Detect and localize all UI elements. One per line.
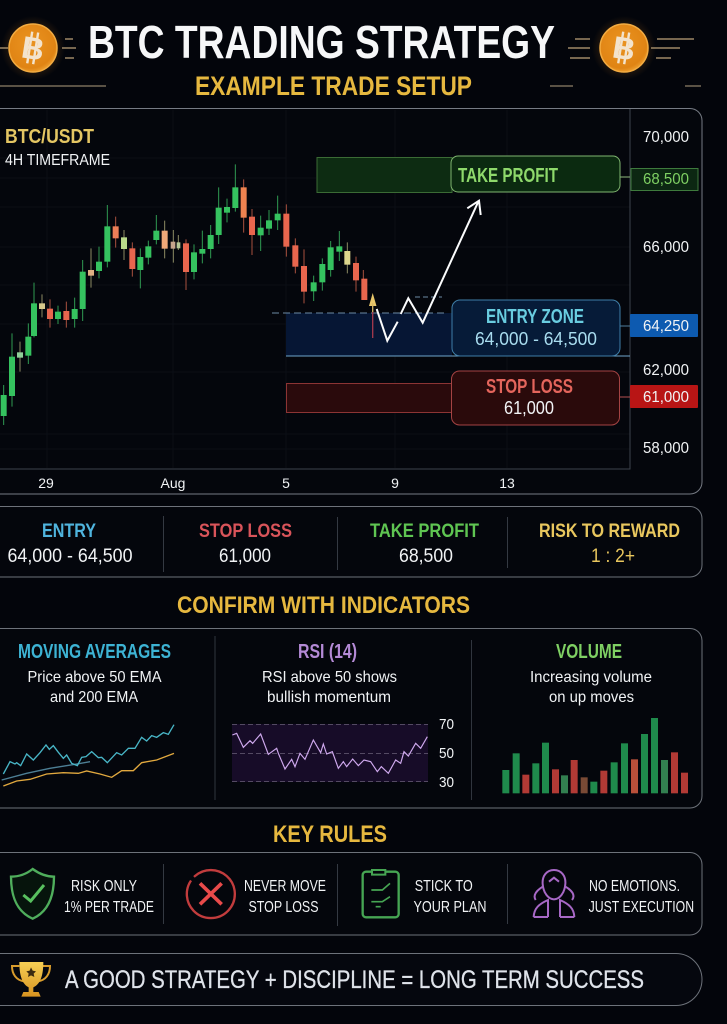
rule: never move stop loss [187,870,326,918]
panel: trade summary [0,506,702,577]
heading: key rules: KEY RULES [273,821,387,848]
take profit band [317,158,452,192]
panel: key rules [0,852,702,935]
rule: risk only: RISK ONLY [71,878,137,895]
stop loss label: STOP LOSS [486,376,573,398]
last candle [369,293,376,338]
price tag: 64,250 [630,314,698,337]
price axis labels [643,129,689,457]
stop loss label: 61,000 [504,398,554,418]
price tag: 64,250: 64,250 [643,318,689,335]
date axis labels: 9 [391,475,399,491]
line chart: rsi: 70 [439,716,454,733]
rule: no emotions [534,870,694,917]
stat: entry: 64,000 - 64,500 [8,546,132,567]
candlesticks [1,164,367,425]
panel: indicators [0,628,702,808]
entry zone label [452,300,630,356]
indicator: volume: Increasing volume [530,669,652,686]
icon: person outline [534,870,574,917]
indicator: rsi [232,641,454,791]
indicator: volume: on up moves [549,689,634,706]
line chart: price and EMAs [2,725,174,786]
indicator: moving averages [2,641,174,786]
price tag: 61,000: 61,000 [643,389,689,406]
icon: clipboard [363,870,399,917]
panel: price chart [0,108,702,494]
rule: stick to your plan: YOUR PLAN [414,899,486,916]
price tag: 68,500: 68,500 [643,171,689,188]
chart title: BTC/USDT [5,126,94,148]
indicator: moving averages: Price above 50 EMA [28,669,162,686]
take profit label [451,156,630,192]
icon: bitcoin coin right: B [610,29,638,68]
subtitle: EXAMPLE TRADE SETUP [195,71,472,101]
indicator: volume [502,641,688,793]
take profit label: TAKE PROFIT [458,165,558,187]
icon: coin streaks left [0,39,106,86]
date axis labels: 13 [499,475,515,491]
indicator: moving averages: MOVING AVERAGES [18,641,171,663]
rule: no emotions: NO EMOTIONS. [589,878,680,895]
indicator: moving averages: and 200 EMA [50,689,138,706]
stat: take profit [370,521,479,567]
entry zone label: ENTRY ZONE [486,306,584,328]
stat: stop loss [199,521,292,567]
rule: never move stop loss: STOP LOSS [248,899,318,916]
stat: stop loss: 61,000 [219,546,271,567]
stat: entry: ENTRY [42,521,96,542]
stop loss label [452,371,630,425]
line chart: rsi: 50 [439,745,454,762]
price tag: 61,000 [630,385,698,408]
date axis labels: 29 [38,475,54,491]
stat: risk to reward: RISK TO REWARD [539,521,680,542]
line chart: rsi [232,716,454,791]
indicator: volume: VOLUME [556,641,622,663]
date axis labels: 5 [282,475,290,491]
rule: never move stop loss: NEVER MOVE [244,878,326,895]
price axis labels: 62,000 [643,362,689,379]
stop loss band [286,384,452,412]
icon: trophy [12,962,50,997]
price axis labels: 66,000 [643,239,689,256]
line chart: rsi: 30 [439,774,454,791]
icon: red cross circle [187,870,235,918]
rule: stick to your plan [363,870,486,917]
indicator: rsi: RSI above 50 shows [262,669,397,686]
title: BTC TRADING STRATEGY [88,16,555,68]
price axis labels: 58,000 [643,440,689,457]
stat: stop loss: STOP LOSS [199,521,292,542]
bar chart: volume [502,718,688,793]
stat: take profit: 68,500 [399,546,453,567]
price tag: 68,500 [631,168,698,190]
stat: risk to reward: 1 : 2+ [591,546,635,567]
entry zone band [272,297,630,356]
date axis labels [38,475,515,491]
stat: risk to reward [539,521,680,567]
timeframe label: 4H TIMEFRAME [5,152,110,169]
rule: risk only: 1% PER TRADE [64,899,154,916]
icon: coin streaks right [550,39,701,86]
icon: bitcoin coin left: B [19,29,47,68]
heading: confirm with indicators: CONFIRM WITH INDICATORS [177,592,470,619]
icon: shield check [11,869,54,919]
rule: stick to your plan: STICK TO [415,878,473,895]
entry zone label: 64,000 - 64,500 [475,329,597,349]
rule: risk only [11,869,154,919]
panel: bottom banner [0,954,702,1006]
rule: no emotions: JUST EXECUTION [589,899,694,916]
arrow: projected price path [377,201,481,341]
date axis labels: Aug [161,475,185,491]
stat: take profit: TAKE PROFIT [370,521,479,542]
icon: bitcoin coin right [592,16,656,80]
indicator: rsi: bullish momentum [267,689,391,706]
price axis labels: 70,000 [643,129,689,146]
header [0,16,701,101]
icon: bitcoin coin left [1,16,65,80]
stat: entry [8,521,132,567]
indicator: rsi: RSI (14) [298,641,357,663]
